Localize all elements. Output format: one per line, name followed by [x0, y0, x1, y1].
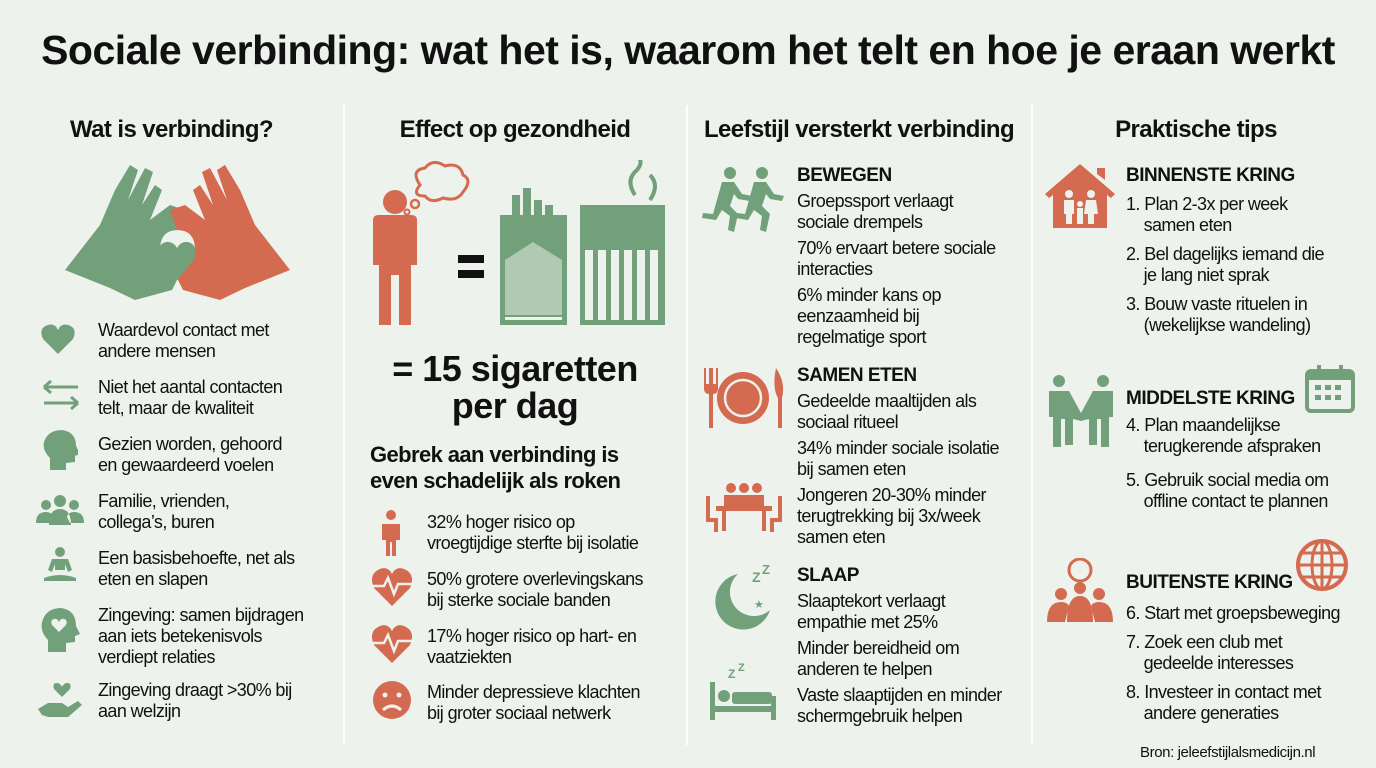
section: binnenste kring: 3. Bouw vaste rituelen in: [1126, 294, 1307, 314]
section: samen eten: [704, 365, 999, 547]
section: buitenste kring: 8. Investeer in contact met: [1126, 682, 1321, 702]
list: health effects: vaatziekten: [427, 647, 511, 667]
section: samen eten: terugtrekking bij 3x/week: [797, 506, 980, 526]
panel: leefstijl: [702, 116, 1014, 726]
title: Sociale verbinding: wat het is, waarom het telt en hoe je eraan werkt: [41, 27, 1335, 73]
section: bewegen: 6% minder kans op: [797, 285, 941, 305]
subheading: even schadelijk als roken: [370, 468, 620, 493]
section: buitenste kring: 7. Zoek een club met: [1126, 632, 1282, 652]
list: what is connection: aan iets betekenisvols: [98, 626, 262, 646]
section: binnenste kring: BINNENSTE KRING: [1126, 165, 1295, 186]
section: binnenste kring: 1. Plan 2-3x per week: [1126, 194, 1288, 214]
section: buitenste kring: BUITENSTE KRING: [1126, 572, 1293, 593]
panel: effect op gezondheid: [370, 116, 665, 723]
section: bewegen: regelmatige sport: [797, 327, 926, 347]
subheading: [370, 442, 620, 493]
section: binnenste kring: (wekelijkse wandeling): [1144, 315, 1310, 335]
list: health effects: bij groter sociaal netwerk: [427, 703, 610, 723]
heading: Praktische tips: [1115, 116, 1277, 143]
section: bewegen: BEWEGEN: [797, 165, 892, 186]
section: slaap: anderen te helpen: [797, 659, 932, 679]
section: bewegen: 70% ervaart betere sociale: [797, 238, 996, 258]
panel: praktische tips: [1045, 116, 1355, 723]
list: health effects: bij sterke sociale banden: [427, 590, 610, 610]
section: buitenste kring: andere generaties: [1144, 703, 1279, 723]
list: health effects: 17% hoger risico op hart- en: [427, 626, 636, 646]
section: samen eten: sociaal ritueel: [797, 412, 898, 432]
list: what is connection: Zingeving draagt >30% bij: [98, 680, 292, 700]
section: buitenste kring: gedeelde interesses: [1144, 653, 1293, 673]
section: slaap: Slaaptekort verlaagt: [797, 591, 945, 611]
section: samen eten: samen eten: [797, 527, 885, 547]
section: binnenste kring: [1045, 164, 1324, 335]
list: health effects: Minder depressieve klachten: [427, 682, 640, 702]
section: buitenste kring: 6. Start met groepsbeweging: [1126, 603, 1340, 623]
section: slaap: ★: [754, 599, 764, 611]
section: bewegen: [702, 165, 996, 347]
section: samen eten: Gedeelde maaltijden als: [797, 391, 976, 411]
section: middelste kring: [1049, 365, 1355, 511]
section: bewegen: eenzaamheid bij: [797, 306, 919, 326]
headline stat: per dag: [452, 385, 578, 426]
list: health effects: [372, 510, 643, 723]
headline stat: = 15 sigaretten: [392, 348, 638, 389]
list: what is connection: collega’s, buren: [98, 512, 214, 532]
heading: Leefstijl versterkt verbinding: [704, 116, 1014, 143]
list: what is connection: andere mensen: [98, 341, 215, 361]
section: samen eten: Jongeren 20-30% minder: [797, 485, 986, 505]
icon: heart hands: [65, 165, 290, 300]
list: what is connection: en gewaardeerd voelen: [98, 455, 274, 475]
list: what is connection: Familie, vrienden,: [98, 491, 229, 511]
section: bewegen: Groepssport verlaagt: [797, 191, 953, 211]
list: what is connection: Niet het aantal contacten: [98, 377, 282, 397]
section: slaap: SLAAP: [797, 565, 859, 586]
section: slaap: Z: [752, 569, 761, 585]
section: bewegen: sociale drempels: [797, 212, 922, 232]
section: samen eten: 34% minder sociale isolatie: [797, 438, 999, 458]
heading: Wat is verbinding?: [70, 116, 273, 143]
section: middelste kring: offline contact te plannen: [1144, 491, 1328, 511]
section: slaap: Minder bereidheid om: [797, 638, 959, 658]
list: health effects: vroegtijdige sterfte bij isolatie: [427, 533, 638, 553]
list: health effects: 32% hoger risico op: [427, 512, 575, 532]
section: middelste kring: 4. Plan maandelijkse: [1126, 415, 1280, 435]
section: slaap: Z: [728, 667, 735, 681]
section: slaap: Z: [762, 562, 770, 577]
section: slaap: empathie met 25%: [797, 612, 937, 632]
panel: wat is verbinding: [36, 116, 304, 721]
list: what is connection: verdiept relaties: [98, 647, 215, 667]
list: what is connection: Gezien worden, gehoord: [98, 434, 282, 454]
section: middelste kring: 5. Gebruik social media om: [1126, 470, 1328, 490]
heading: Effect op gezondheid: [400, 116, 630, 143]
list: what is connection: Waardevol contact met: [98, 320, 269, 340]
section: binnenste kring: 2. Bel dagelijks iemand die: [1126, 244, 1324, 264]
list: what is connection: [36, 320, 304, 721]
list: what is connection: Een basisbehoefte, net als: [98, 548, 295, 568]
section: slaap: Z: [738, 662, 745, 674]
list: what is connection: aan welzijn: [98, 701, 180, 721]
section: binnenste kring: samen eten: [1144, 215, 1232, 235]
list: what is connection: eten en slapen: [98, 569, 208, 589]
section: slaap: schermgebruik helpen: [797, 706, 962, 726]
list: health effects: 50% grotere overlevingskans: [427, 569, 643, 589]
section: middelste kring: MIDDELSTE KRING: [1126, 388, 1295, 409]
source: Bron: jeleefstijlalsmedicijn.nl: [1140, 744, 1315, 761]
section: slaap: Vaste slaaptijden en minder: [797, 685, 1002, 705]
list: what is connection: Zingeving: samen bijdragen: [98, 605, 304, 625]
section: samen eten: bij samen eten: [797, 459, 906, 479]
section: slaap: [710, 562, 1002, 726]
section: buitenste kring: [1047, 539, 1348, 723]
section: middelste kring: terugkerende afspraken: [1144, 436, 1321, 456]
headline stat: [392, 348, 638, 426]
section: samen eten: SAMEN ETEN: [797, 365, 917, 386]
section: bewegen: interacties: [797, 259, 872, 279]
list: what is connection: telt, maar de kwaliteit: [98, 398, 253, 418]
section: binnenste kring: je lang niet sprak: [1144, 265, 1269, 285]
subheading: Gebrek aan verbinding is: [370, 442, 618, 467]
icon: person equals cigarettes: [373, 160, 665, 325]
